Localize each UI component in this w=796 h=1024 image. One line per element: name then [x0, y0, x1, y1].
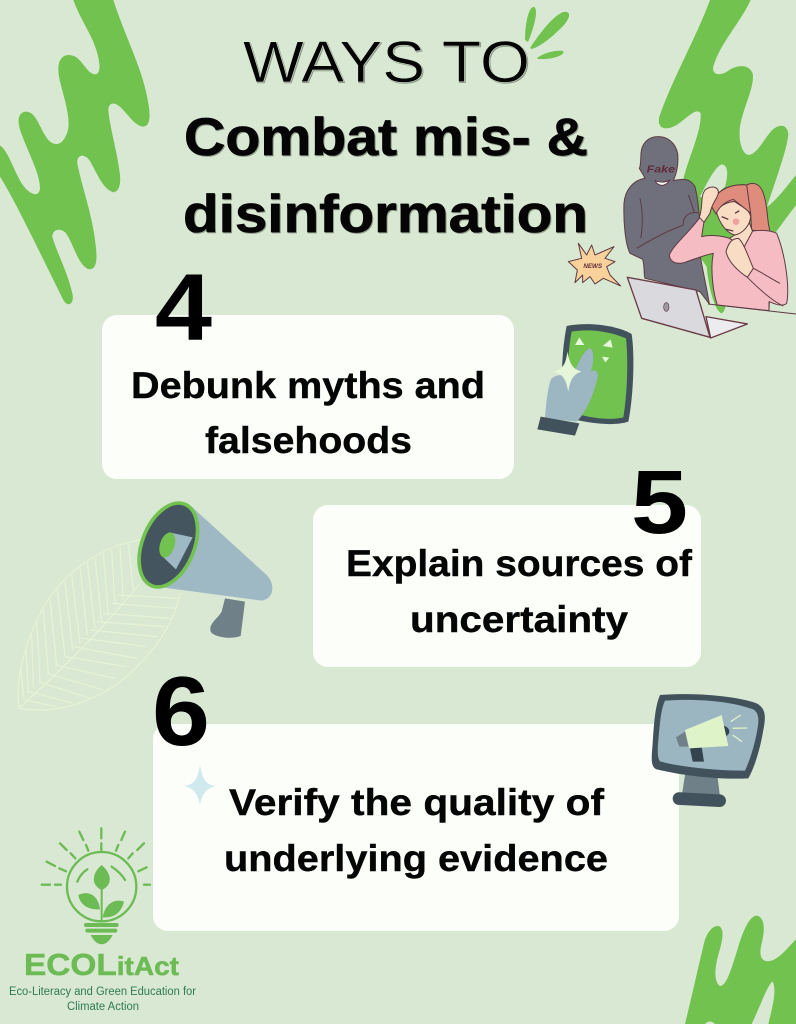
text: verify quality: underlying evidence [224, 838, 608, 879]
text: debunk myths: falsehoods [205, 420, 412, 461]
logo tagline: Climate Action [67, 1001, 139, 1013]
table line [708, 304, 796, 314]
decorative blob: top left [0, 0, 150, 304]
text: explain sources: uncertainty [410, 599, 628, 640]
man in dark hood [624, 137, 709, 304]
news burst [568, 243, 621, 286]
panel: explain card [313, 505, 701, 667]
laptop [627, 277, 747, 338]
logo wordmark: ECOL itAct [24, 947, 179, 982]
icon: lightbulb with plant [42, 828, 150, 944]
icon: megaphone [128, 494, 272, 638]
text: debunk myths: Debunk myths and [131, 365, 485, 406]
decorative blob: top right [659, 0, 796, 313]
decorative leaf outline [18, 540, 180, 710]
logo: ecolitact [9, 828, 196, 1013]
logo tagline: Eco-Literacy and Green Education for [9, 986, 196, 998]
icon: sparkle [185, 764, 215, 805]
icon: monitor with megaphone [652, 694, 765, 807]
number 6: 6 [152, 656, 210, 766]
text: explain sources: Explain sources of [346, 543, 693, 584]
title line: ways to: WAYS TO [243, 30, 530, 95]
illustration: fake news man and confused woman at laptop [568, 137, 796, 338]
news burst: NEWS [583, 263, 603, 270]
title line: disinformation: disinformation [183, 185, 588, 244]
panel: debunk card [102, 315, 514, 479]
number 4: 4 [155, 255, 212, 361]
text: verify quality: Verify the quality of [229, 782, 605, 823]
panel: verify card [153, 724, 679, 931]
number 5: 5 [631, 453, 688, 553]
woman in pink sweater [669, 183, 788, 311]
decorative blob: bottom right [685, 916, 796, 1024]
decorative accent leaves near title [525, 7, 569, 59]
fake forehead label: Fake [647, 165, 675, 176]
title [183, 30, 588, 244]
title line: combat mis- and: Combat mis- & [184, 108, 588, 167]
icon: tablet with pointing hand [537, 324, 633, 436]
